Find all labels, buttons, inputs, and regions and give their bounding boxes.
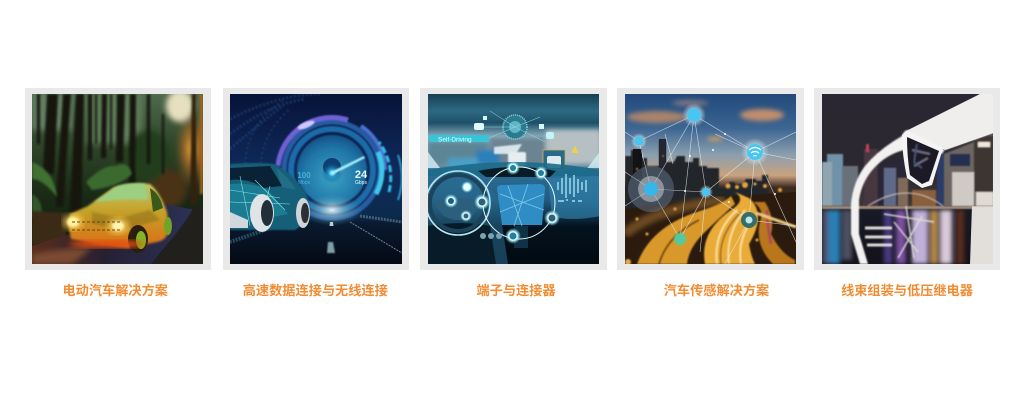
- wheel: [864, 193, 942, 258]
- water reflections: [822, 210, 964, 264]
- small speed value: Mbps: [297, 180, 310, 186]
- panel: high-speed data and wireless connectivity: [223, 88, 409, 298]
- sound wave: [558, 174, 586, 201]
- photo: smart car cockpit: [428, 94, 599, 264]
- panel: electric vehicle solutions: [25, 88, 211, 298]
- image frame: forest car: [24, 88, 211, 270]
- icon: wifi: [749, 148, 761, 156]
- caption: 线束组装与低压继电器: [841, 283, 973, 298]
- panel: terminals and connectors: [420, 88, 607, 298]
- road: [230, 216, 402, 253]
- icon: wireframe car: [230, 163, 310, 232]
- center map screen: [496, 184, 544, 248]
- photo: glowing car on a forest road: [32, 94, 203, 264]
- self-driving label: Self-Driving: [438, 136, 471, 144]
- skyline: [625, 140, 768, 209]
- icon: needle: [330, 156, 364, 175]
- connection ring: [482, 167, 554, 239]
- speed value: Gbps: [355, 180, 367, 186]
- speed value: 24: [354, 169, 367, 181]
- caption: 汽车传感解决方案: [664, 283, 769, 298]
- clouds: [627, 100, 784, 141]
- network lines: [625, 115, 796, 264]
- feature icons: [444, 161, 560, 244]
- image frame: smart city: [617, 88, 804, 270]
- photo: smart city network at dusk: [625, 94, 796, 264]
- panel: automotive sensor solutions: [617, 88, 804, 298]
- image frame: cockpit: [420, 88, 607, 270]
- hologram globe: [474, 111, 554, 142]
- small speed value: 100: [297, 171, 311, 180]
- light-trail highways: [637, 192, 796, 264]
- caption: 高速数据连接与无线连接: [243, 283, 388, 298]
- sensor nodes: [628, 103, 769, 245]
- photo: double-exposure car over night city: [822, 94, 993, 264]
- icon: car: [63, 183, 172, 253]
- dashboard: [428, 176, 508, 264]
- image frame: speedometer: [222, 88, 409, 270]
- self-driving label: [428, 135, 488, 144]
- steering wheel: [426, 171, 490, 235]
- central city through the car: [878, 154, 948, 207]
- image frame: car and night city: [814, 88, 1000, 270]
- speed value: [354, 169, 367, 186]
- left skyline: [822, 144, 878, 207]
- icon: white car body: [850, 94, 993, 264]
- photo: speedometer and wireframe car: [230, 94, 402, 264]
- caption: 电动汽车解决方案: [62, 283, 168, 298]
- small speed value: [297, 171, 311, 186]
- warning icon: [570, 146, 578, 153]
- panel: wire harness assemblies and low-voltage relays: [814, 88, 1000, 298]
- gauge rings: [278, 117, 401, 218]
- right light region: [970, 206, 993, 264]
- caption: 端子与连接器: [476, 283, 556, 298]
